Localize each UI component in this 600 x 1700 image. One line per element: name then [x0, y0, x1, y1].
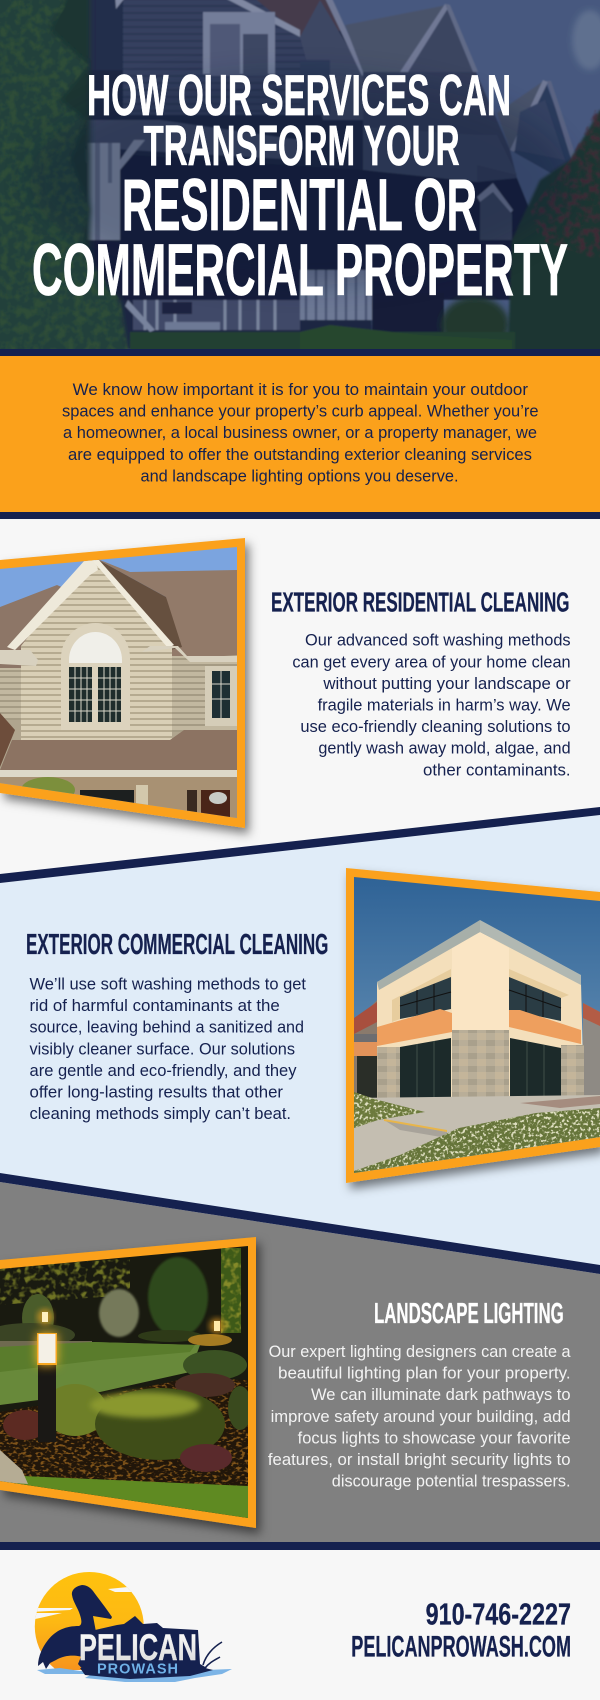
logo: Pelican ProWash: PELICAN [79, 1627, 197, 1668]
image frame: landscape lighting [0, 1237, 256, 1528]
panel: intro orange band: a homeowner, a local business owner, or a property manager, we [63, 424, 537, 442]
section heading: exterior commercial cleaning: EXTERIOR COMMERCIAL CLEANING [26, 929, 328, 961]
text block: residential cleaning description: without putting your landscape or [322, 675, 571, 693]
panel: intro orange band: are equipped to offer the outstanding exterior cleaning services [68, 446, 532, 464]
panel: landscape lighting section background [0, 1182, 600, 1542]
panel: intro orange band: spaces and enhance your property’s curb appeal. Whether you’re [62, 403, 538, 421]
navy divider below hero [0, 349, 600, 356]
text block: landscape lighting description: We can illuminate dark pathways to [311, 1386, 571, 1404]
text block: commercial cleaning description: are gentle and eco-friendly, and they [30, 1062, 297, 1080]
text block: commercial cleaning description: cleaning methods simply can’t beat. [30, 1105, 291, 1123]
main title [32, 64, 568, 311]
diagonal divider one [0, 807, 600, 883]
panel: intro orange band: and landscape lighting options you deserve. [140, 467, 459, 485]
text block: residential cleaning description: other contaminants. [423, 761, 571, 779]
image frame: residential house [0, 538, 245, 830]
image frame: commercial building [346, 868, 600, 1183]
text block: landscape lighting description: improve safety around your building, add [271, 1408, 571, 1426]
text block: landscape lighting description: discourage potential trespassers. [332, 1473, 571, 1491]
text block: commercial cleaning description: rid of harmful contaminants at the [30, 997, 280, 1015]
text block: landscape lighting description: beautiful lighting plan for your property. [278, 1365, 571, 1383]
hero photo: house at dusk [0, 0, 600, 362]
text block: commercial cleaning description: offer long-lasting results that other [30, 1084, 284, 1102]
text block: residential cleaning description: fragile materials in harm’s way. We [318, 696, 571, 714]
text block: residential cleaning description: gently wash away mold, algae, and [318, 740, 571, 758]
text block: commercial cleaning description: visibly cleaner surface. Our solutions [30, 1040, 295, 1058]
text block: landscape lighting description: focus lights to showcase your favorite [298, 1429, 571, 1447]
text block: commercial cleaning description [30, 976, 307, 1123]
text block: landscape lighting description [268, 1343, 571, 1491]
navy divider above footer [0, 1542, 600, 1550]
text block: residential cleaning description [292, 632, 571, 779]
text block: residential cleaning description: can get every area of your home clean [292, 653, 571, 671]
logo: Pelican ProWash: PROWASH [97, 1662, 178, 1678]
text block: residential cleaning description: Our advanced soft washing methods [305, 632, 571, 650]
text block: residential cleaning description: use eco-friendly cleaning solutions to [300, 718, 571, 736]
logo: Pelican ProWash [30, 1572, 232, 1682]
text block: commercial cleaning description: source, leaving behind a sanitized and [30, 1019, 304, 1037]
panel: intro orange band [0, 356, 600, 519]
panel: intro orange band: We know how important it is for you to maintain your outdoor [73, 381, 529, 399]
text block: landscape lighting description: features, or install bright security lights to [268, 1451, 571, 1469]
text block: landscape lighting description: Our expert lighting designers can create a [269, 1343, 571, 1361]
text block: commercial cleaning description: We’ll use soft washing methods to get [30, 976, 307, 994]
panel: commercial section background [0, 815, 600, 1274]
diagonal divider two [0, 1173, 600, 1274]
